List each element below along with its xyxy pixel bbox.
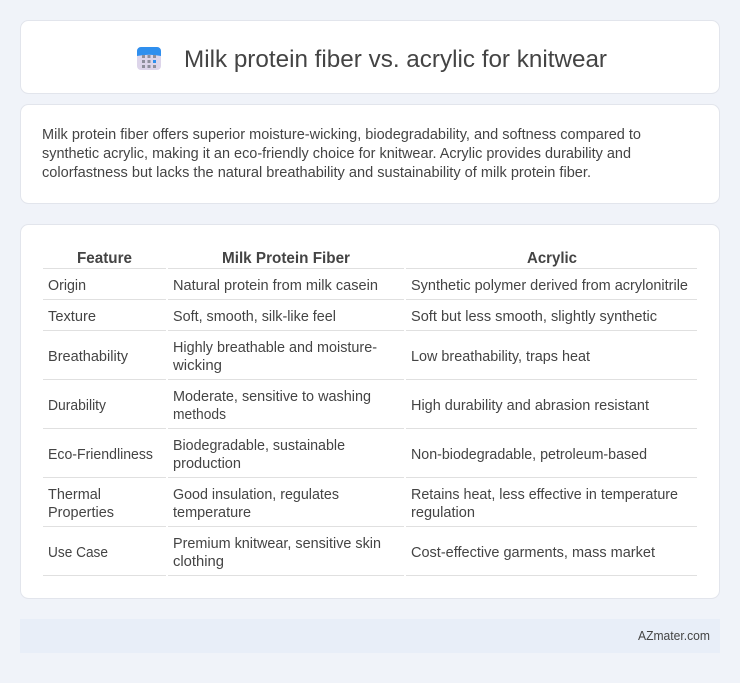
row: breathability: Breathability — [48, 349, 129, 365]
summary text: colorfastness but lacks the natural breathability and sustainability of milk protein fiber. — [42, 164, 591, 181]
row: breathability: Low breathability, traps heat — [411, 349, 590, 365]
row: origin: Synthetic polymer derived from acrylonitrile — [411, 278, 688, 294]
row: use case: Use Case — [48, 545, 108, 561]
table header — [77, 250, 577, 267]
row: texture: Texture — [48, 309, 96, 325]
row: durability: High durability and abrasion resistant — [411, 398, 649, 414]
row: durability: Moderate, sensitive to washing — [173, 389, 371, 405]
panel: summary — [20, 104, 720, 204]
row: breathability: wicking — [172, 358, 222, 374]
footer credit: AZmater.com — [638, 629, 710, 643]
summary text: synthetic acrylic, making it an eco-friendly choice for knitwear. Acrylic provides durability and — [42, 145, 631, 162]
row: thermal properties: Retains heat, less effective in temperature — [411, 487, 678, 503]
row: thermal properties: regulation — [411, 505, 475, 521]
panel: comparison table — [20, 224, 720, 598]
row: eco-friendliness: Non-biodegradable, petroleum-based — [411, 447, 647, 463]
footer bar — [20, 619, 720, 653]
row: texture: Soft, smooth, silk-like feel — [173, 309, 336, 325]
row: thermal properties: Good insulation, regulates — [173, 487, 339, 503]
row: eco-friendliness: Eco-Friendliness — [48, 447, 153, 463]
row: breathability: Highly breathable and moisture- — [173, 340, 377, 356]
row: eco-friendliness: Biodegradable, sustainable — [173, 438, 345, 454]
row: thermal properties: temperature — [173, 505, 251, 521]
row: eco-friendliness — [48, 438, 647, 472]
icon: calendar — [137, 47, 161, 70]
table row rules — [43, 268, 697, 576]
row: thermal properties — [48, 487, 678, 521]
summary text: Milk protein fiber offers superior moisture-wicking, biodegradability, and softness compared to — [42, 126, 641, 143]
row: origin — [48, 278, 688, 294]
row: use case: Cost-effective garments, mass market — [411, 545, 655, 561]
row: durability: methods — [173, 407, 226, 423]
table header: Feature — [77, 250, 132, 267]
table header: Milk Protein Fiber — [222, 250, 350, 267]
row: use case: Premium knitwear, sensitive skin — [173, 536, 381, 552]
row: use case — [48, 536, 655, 570]
row: thermal properties: Thermal — [48, 487, 101, 503]
title: Milk protein fiber vs. acrylic for knitwear — [184, 46, 607, 73]
panel: title header — [20, 20, 720, 94]
row: texture — [48, 309, 657, 325]
row: texture: Soft but less smooth, slightly synthetic — [411, 309, 657, 325]
row: durability — [48, 389, 649, 423]
row: use case: clothing — [173, 554, 224, 570]
table header: Acrylic — [527, 250, 577, 267]
row: origin: Natural protein from milk casein — [173, 278, 378, 294]
row: origin: Origin — [48, 278, 86, 294]
row: breathability — [48, 340, 590, 374]
row: thermal properties: Properties — [48, 505, 114, 521]
row: eco-friendliness: production — [173, 456, 241, 472]
summary text — [42, 126, 641, 181]
row: durability: Durability — [48, 398, 107, 414]
